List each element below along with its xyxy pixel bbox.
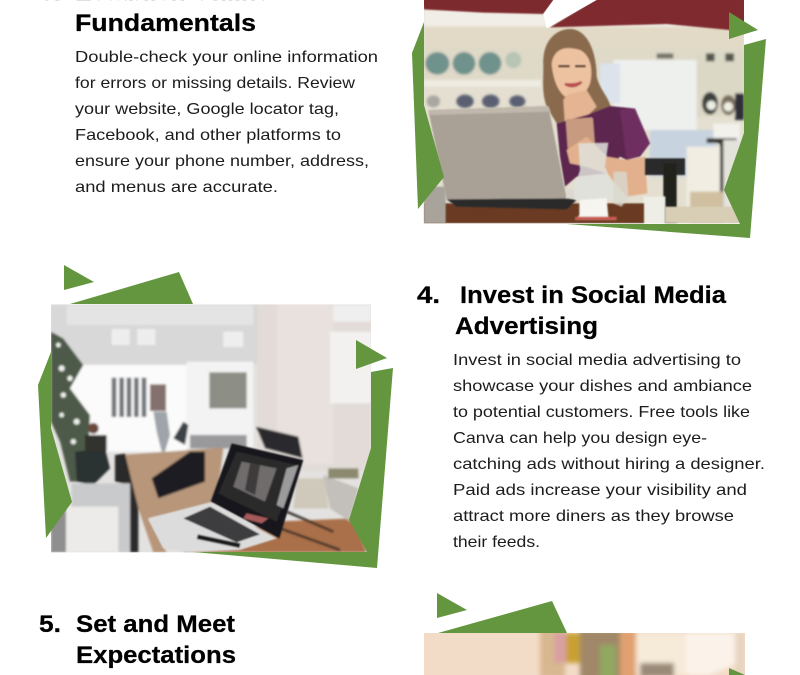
chair and background table xyxy=(643,158,685,223)
text block: section 3 body: your website, Google locator tag, xyxy=(75,101,339,118)
heading: section 5: Expectations xyxy=(76,642,236,669)
text block: section 4 body: attract more diners as they browse xyxy=(453,508,734,525)
text block: section 3 body: Facebook, and other platforms to xyxy=(75,127,341,144)
desk xyxy=(120,448,223,552)
text block: section 4 body: Invest in social media advertising to xyxy=(453,352,741,369)
text block: section 4 body: Canva can help you design eye- xyxy=(453,430,707,447)
heading: section 5: Set and Meet xyxy=(76,611,235,638)
section 3: establish online fundamentals xyxy=(39,0,378,196)
decorative green frame: photo 5 xyxy=(437,593,745,675)
text block: section 4 body: showcase your dishes and ambiance xyxy=(453,378,752,395)
red awning xyxy=(420,0,747,32)
carafe xyxy=(424,143,628,223)
text block: section 3 body: and menus are accurate. xyxy=(75,179,278,196)
heading: section 4: 4. xyxy=(417,282,440,309)
text block: section 4 body: to potential customers. Free tools like xyxy=(453,404,750,421)
heading: section 4: Advertising xyxy=(455,313,598,340)
heading: section 4 xyxy=(417,282,727,340)
laptop xyxy=(428,106,593,209)
text block: section 3 body xyxy=(75,49,378,196)
laptop xyxy=(148,443,303,552)
photo: restaurant interior xyxy=(424,633,745,675)
heading: section 5: 5. xyxy=(39,611,61,638)
photo panel: blurred restaurant interior, cropped at bottom xyxy=(424,593,745,675)
text block: section 3 body: Double-check your online information xyxy=(75,49,378,66)
decorative green frame: photo 3-1 xyxy=(412,12,766,238)
photo panel: woman with laptop and phone xyxy=(412,0,766,238)
photo: cafe scene xyxy=(420,0,747,223)
text block: section 4 body: Paid ads increase your visibility and xyxy=(453,482,747,499)
text block: section 4 body: their feeds. xyxy=(453,534,540,551)
heading: section 3: Fundamentals xyxy=(75,10,256,37)
plant xyxy=(51,332,90,482)
section 5: set and meet expectations xyxy=(39,611,236,669)
text block: section 4 body: catching ads without hiring a designer. xyxy=(453,456,765,473)
heading: section 3 xyxy=(39,0,270,37)
photo: office scene xyxy=(51,304,371,552)
photo panel: open-plan office with laptop xyxy=(38,265,393,568)
heading: section 4: Invest in Social Media xyxy=(460,282,727,309)
text block: section 3 body: for errors or missing details. Review xyxy=(75,75,355,92)
woman xyxy=(543,29,650,197)
text block: section 4 body xyxy=(453,352,765,551)
heading: section 5 xyxy=(39,611,236,669)
section 4: invest in social media advertising xyxy=(417,282,765,551)
text block: section 3 body: ensure your phone number, address, xyxy=(75,153,369,170)
decorative green frame: photo 4 xyxy=(38,265,393,568)
table xyxy=(424,203,644,223)
seated person xyxy=(75,448,110,485)
